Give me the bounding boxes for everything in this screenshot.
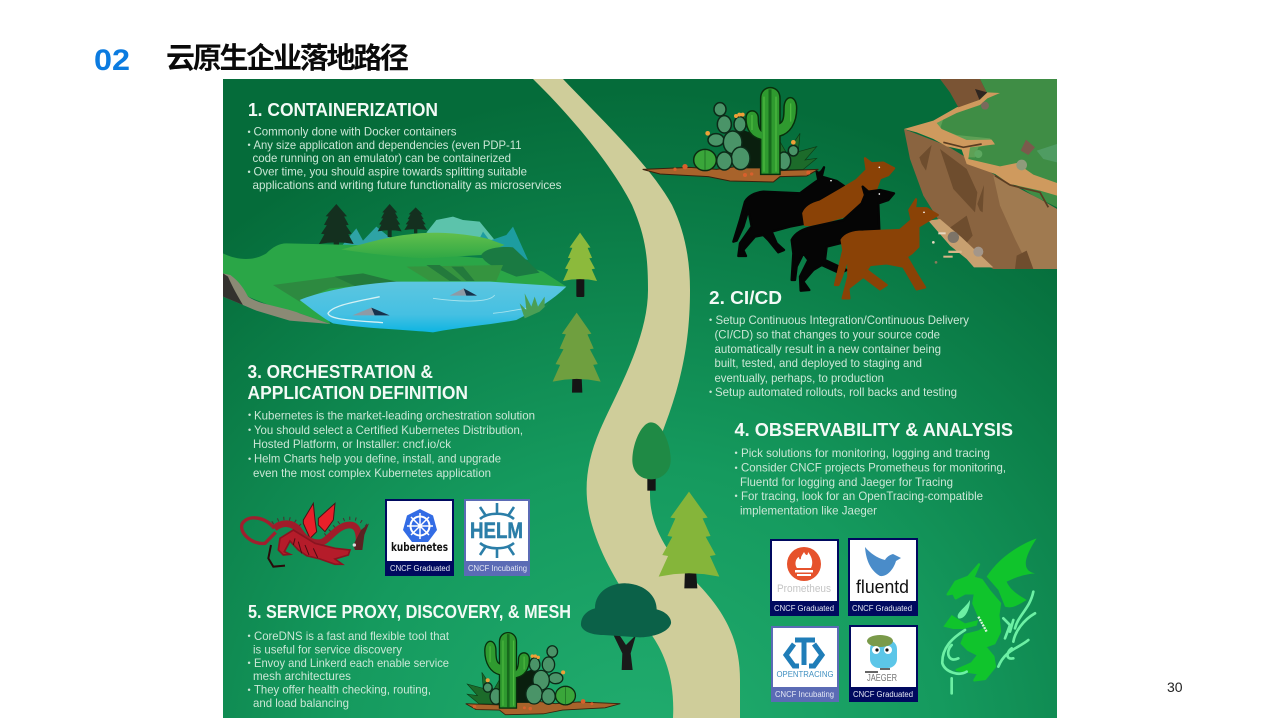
bull: brown front [835, 199, 938, 298]
text block: 5 service proxy: mesh architectures [253, 669, 351, 683]
text block: 2 ci/cd: • [709, 387, 712, 397]
text block: 3 orchestration: Hosted Platform, or Installer: cncf.io/ck [253, 437, 451, 451]
illustration: cactus group lower [466, 633, 620, 715]
text block: 4 observability: 4. OBSERVABILITY & ANALYSIS [734, 420, 1013, 440]
badge: fluentd: CNCF Graduated [852, 604, 912, 613]
badge: kubernetes: CNCF Graduated [390, 564, 450, 573]
title: 云原生企业落地路径 [166, 42, 409, 75]
badge: jaeger: CNCF Graduated [853, 690, 913, 699]
text block: 3 orchestration: • [248, 410, 251, 420]
badge: prometheus: CNCF Graduated [774, 604, 834, 613]
text block: 4 observability: • [734, 448, 738, 458]
tree: upper olive fir [563, 233, 597, 297]
text block: 1 containerization [248, 100, 562, 192]
text block: 2 ci/cd: built, tested, and deployed to staging and [714, 356, 922, 370]
badge: prometheus [770, 539, 839, 616]
badge: helm [464, 499, 530, 576]
text block: 2 ci/cd: (CI/CD) so that changes to your source code [714, 328, 940, 342]
text block: 3 orchestration: Kubernetes is the market-leading orchestration solution [254, 408, 535, 422]
text block: 1 containerization: applications and writing future functionality as microservices [252, 178, 562, 192]
badge: kubernetes: kubernetes [391, 540, 448, 554]
text block: 5 service proxy: and load balancing [253, 696, 349, 710]
text block: 2 ci/cd: eventually, perhaps, to production [714, 371, 884, 385]
text block: 5 service proxy: • [248, 631, 251, 641]
illustration: running bulls [733, 158, 938, 298]
text block: 2 ci/cd: Setup automated rollouts, roll backs and testing [715, 385, 957, 399]
text block: 1 containerization: Over time, you should aspire towards splitting suitable [254, 164, 527, 178]
text block: 5 service proxy: CoreDNS is a fast and flexible tool that [254, 629, 450, 643]
badge: opentracing [771, 626, 839, 702]
text block: 4 observability: Pick solutions for monitoring, logging and tracing [741, 446, 990, 460]
text block: 2 ci/cd [709, 288, 969, 399]
text block: 4 observability [734, 420, 1013, 518]
text block: 1 containerization: Any size application and dependencies (even PDP-11 [254, 138, 522, 152]
text block: 1 containerization: Commonly done with Docker containers [254, 124, 457, 138]
text block: 2 ci/cd: automatically result in a new container being [714, 342, 941, 356]
text block: 1 containerization: • [248, 167, 251, 177]
badge: kubernetes [385, 499, 454, 576]
text block: 2 ci/cd: 2. CI/CD [709, 288, 782, 308]
illustration: cliff [904, 79, 1057, 269]
icon: helm wheel [480, 503, 514, 558]
text block: 3 orchestration [248, 362, 535, 480]
bull: black front [792, 187, 894, 291]
text block: 1 containerization: code running on an emulator) can be containerized [252, 151, 511, 165]
text block: 3 orchestration: even the most complex Kubernetes application [253, 466, 491, 480]
section number: 02 [94, 44, 130, 77]
icon: jaeger gopher [865, 635, 897, 672]
badge: jaeger: JAEGER [867, 672, 897, 684]
badge: helm: HELM [470, 518, 523, 543]
tree: bright fir [659, 492, 719, 588]
text block: 3 orchestration: • [248, 454, 251, 464]
text block: 4 observability: implementation like Jaeger [740, 504, 877, 518]
text block: 1 containerization: 1. CONTAINERIZATION [248, 100, 438, 120]
text block: 4 observability: Fluentd for logging and Jaeger for Tracing [740, 475, 953, 489]
badge: fluentd [848, 538, 918, 616]
text block: 5 service proxy: Envoy and Linkerd each enable service [254, 656, 449, 670]
text block: 3 orchestration: You should select a Certified Kubernetes Distribution, [254, 423, 523, 437]
illustration: lake landscape [223, 204, 566, 332]
page number: 30 [1167, 679, 1183, 695]
text block: 4 observability: • [734, 491, 738, 501]
text block: 1 containerization: • [248, 127, 251, 137]
text block: 3 orchestration: APPLICATION DEFINITION [248, 383, 468, 403]
text block: 4 observability: For tracing, look for an OpenTracing-compatible [741, 489, 983, 503]
icon: prometheus flame [787, 547, 821, 581]
winding road [533, 79, 740, 718]
bull: black rear [733, 167, 844, 256]
illustration: green dragon [942, 538, 1037, 693]
tree: second olive fir [553, 313, 601, 393]
badge: jaeger [849, 625, 918, 702]
text block: 4 observability: • [734, 463, 738, 473]
text block: 4 observability: Consider CNCF projects Prometheus for monitoring, [741, 460, 1006, 474]
text block: 1 containerization: • [248, 140, 251, 150]
text block: 3 orchestration: • [248, 425, 251, 435]
text block: 5 service proxy: They offer health checking, routing, [254, 682, 431, 696]
badge: opentracing: OPENTRACING [776, 670, 834, 679]
text block: 3 orchestration: Helm Charts help you define, install, and upgrade [254, 452, 501, 466]
text block: 5 service proxy: 5. SERVICE PROXY, DISCOVERY, & MESH [248, 602, 571, 622]
tree: broad dark tree [581, 583, 671, 670]
tree: egg shaped [632, 422, 671, 491]
text block: 2 ci/cd: • [709, 315, 712, 325]
text block: 5 service proxy: • [248, 685, 251, 695]
text block: 5 service proxy: is useful for service discovery [253, 642, 402, 656]
illustration: cactus group upper [643, 88, 818, 182]
panel: roadmap illustration [223, 79, 1057, 718]
badge: fluentd: fluentd [856, 577, 909, 597]
icon: fluentd bird [865, 547, 901, 576]
icon: opentracing logo [786, 640, 822, 666]
badge: prometheus: Prometheus [777, 583, 831, 595]
text block: 3 orchestration: 3. ORCHESTRATION & [248, 362, 433, 382]
icon: small firs and tree along road [553, 233, 719, 670]
bull: brown rear [803, 158, 894, 225]
badge: helm: CNCF Incubating [468, 564, 527, 573]
text block: 5 service proxy [248, 602, 571, 710]
text block: 2 ci/cd: Setup Continuous Integration/Continuous Delivery [716, 313, 969, 327]
text block: 5 service proxy: • [248, 658, 251, 668]
icon: kubernetes wheel [403, 509, 437, 542]
badge: opentracing: CNCF Incubating [775, 690, 834, 699]
illustration: red dragon [242, 503, 369, 567]
